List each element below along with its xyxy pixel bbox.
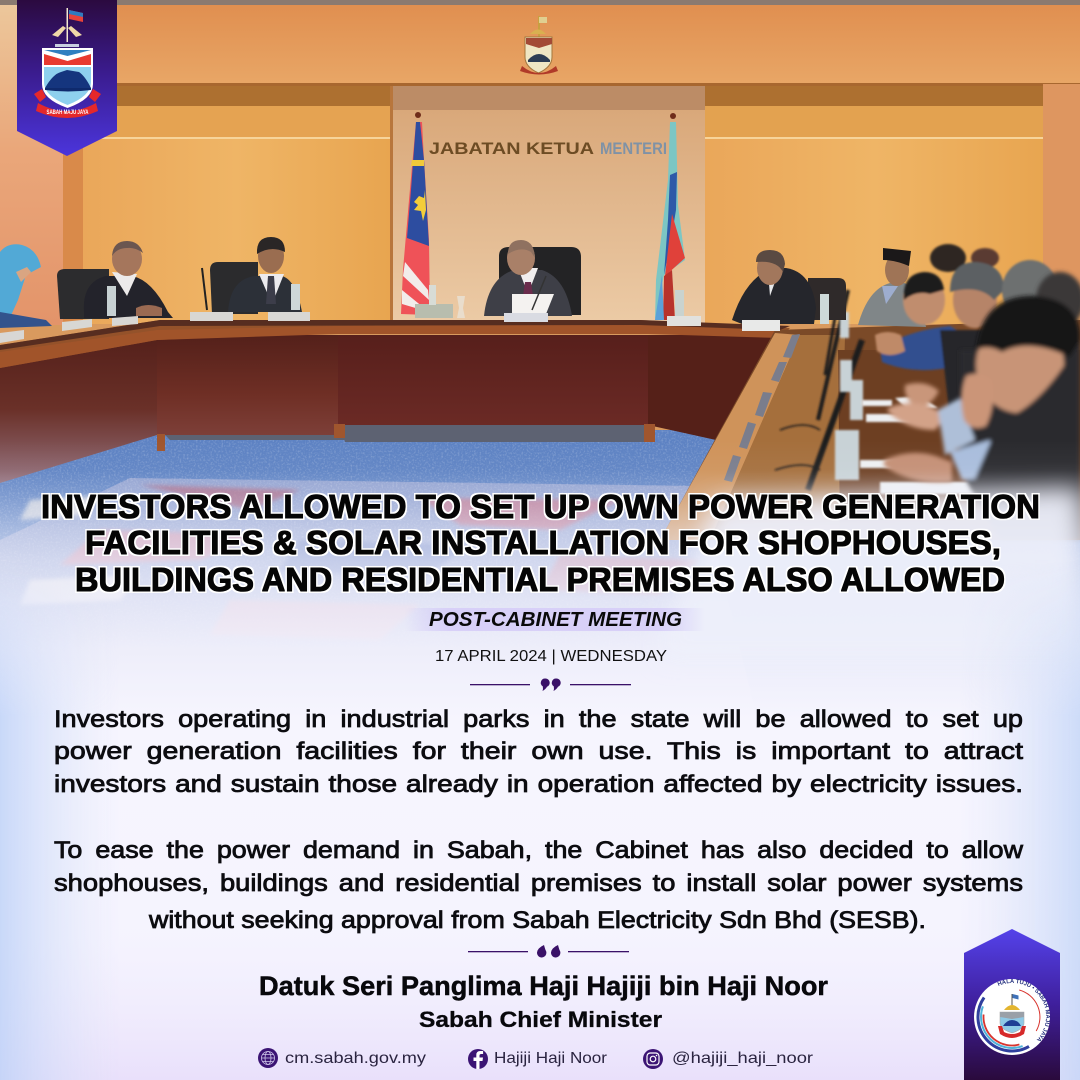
wall lettering: [429, 139, 667, 158]
water bottles: [835, 312, 863, 480]
photo: cabinet meeting room: [0, 0, 1080, 730]
microphone: [202, 268, 207, 310]
footer: website: cm.sabah.gov.my: [285, 1050, 426, 1067]
delegates behind: [875, 244, 1058, 460]
paragraph one: investors and sustain those already in operation affected by electricity issues.: [54, 771, 1023, 798]
left seated delegates: [0, 237, 310, 343]
speaker role: Sabah Chief Minister: [419, 1007, 662, 1032]
left top banner with state crest: [17, 0, 117, 156]
date: 17 APRIL 2024 | WEDNESDAY: [435, 648, 667, 665]
Malaysian flag: [401, 112, 430, 315]
emblem on wall: [520, 16, 558, 74]
small crest: [998, 994, 1026, 1038]
wall panels: [0, 0, 1080, 560]
right side fade over blurred delegates: [660, 488, 1080, 660]
name cards: [0, 312, 310, 343]
chair three: [210, 262, 258, 314]
footer: website: [258, 1048, 426, 1068]
carpet: [0, 430, 1080, 730]
paragraph two: [54, 837, 1023, 934]
suit: [484, 270, 572, 316]
soft fade into the light background: [0, 440, 1080, 730]
wall lettering: JABATAN KETUA: [429, 139, 594, 158]
opening quote divider: [470, 678, 631, 691]
badge: Hala Tuju Sabah Maju Jaya: [974, 979, 1050, 1055]
boardroom table: [0, 290, 1080, 540]
delegate in songkok: [858, 248, 926, 327]
title: BUILDINGS AND RESIDENTIAL PREMISES ALSO ALLOWED: [75, 561, 1005, 598]
footer: facebook: Hajiji Haji Noor: [494, 1050, 608, 1067]
delegate with glasses: [732, 250, 816, 331]
state crest: [34, 8, 101, 118]
footer: instagram: @hajiji_haji_noor: [672, 1050, 814, 1067]
speaker name: Datuk Seri Panglima Haji Hajiji bin Haji Noor: [259, 971, 828, 1001]
subtitle: post-cabinet meeting: POST-CABINET MEETING: [429, 609, 682, 631]
icon: facebook: [468, 1049, 488, 1069]
chair: [499, 247, 581, 315]
paragraph one: Investors operating in industrial parks in the state will be allowed to set up: [54, 706, 1023, 733]
chairperson: [484, 240, 581, 322]
body text: [54, 706, 1023, 934]
title: FACILITIES & SOLAR INSTALLATION FOR SHOPHOUSES,: [85, 524, 1001, 561]
chair one: [57, 269, 109, 319]
right seated delegates: [732, 244, 1080, 540]
long table arm: [660, 290, 1080, 540]
delegate two: [84, 241, 173, 318]
title: INVESTORS ALLOWED TO SET UP OWN POWER GENERATION: [41, 488, 1040, 525]
badge: Hala Tuju Sabah Maju Jaya: HALA TUJU • SABAH MAJU JAYA: [997, 979, 1050, 1042]
bottom right banner with badge: [964, 929, 1060, 1080]
name plates: [724, 334, 800, 482]
wall lettering: MENTERI: [600, 139, 667, 158]
icon: globe: [258, 1048, 278, 1068]
paragraph two: shophouses, buildings and residential premises to install solar power systems: [54, 870, 1023, 897]
icon: instagram: [643, 1049, 663, 1069]
desk items: [415, 285, 701, 326]
papers: [860, 396, 1000, 494]
cables and microphones: [775, 290, 862, 490]
Sabah flag: [655, 113, 685, 320]
motto ribbon: SABAH MAJU JAYA: [46, 110, 89, 116]
title: [41, 488, 1040, 598]
table top rim: [0, 320, 790, 368]
table front panels: [0, 335, 780, 483]
footer: instagram: [643, 1049, 814, 1069]
delegate three: [228, 237, 302, 312]
paragraph two: To ease the power demand in Sabah, the Cabinet has also decided to allow: [54, 837, 1023, 864]
lower light background: [0, 560, 1080, 1080]
paragraph two: without seeking approval from Sabah Electricity Sdn Bhd (SESB).: [148, 907, 926, 934]
paragraph one: power generation facilities for their own use. This is important to attract: [54, 738, 1023, 765]
paragraph one: [54, 706, 1023, 798]
delegate in blue hijab: [0, 244, 52, 328]
papers in hands: [512, 294, 554, 314]
footer: facebook: [468, 1049, 608, 1069]
closing quote divider: [468, 945, 629, 957]
blurred foreground delegate: [884, 272, 1080, 540]
